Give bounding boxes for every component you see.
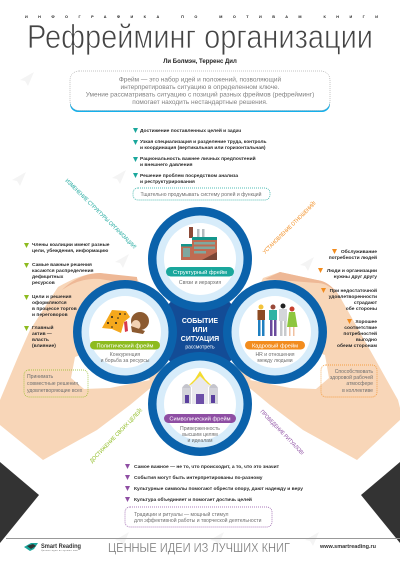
frame: human resources: HR и отношения — [255, 352, 295, 358]
list: human resources frame: обе стороны — [346, 305, 377, 312]
corner triangle: right — [361, 462, 400, 543]
list: political frame: власть — [32, 338, 49, 343]
frame: human resources: Кадровый фрейм — [252, 342, 298, 350]
logo: Smart Reading — [41, 544, 81, 550]
logo: Ценные идеи из лучших книг — [41, 550, 78, 552]
center: event or situation — [73, 207, 327, 456]
frame: symbolic: и идеалам — [187, 438, 213, 444]
frame: symbolic: Приверженность — [180, 426, 220, 432]
list: political frame: совместные решения, — [27, 381, 79, 387]
frame: symbolic — [148, 352, 252, 456]
list: human resources frame: удовлетворенности — [329, 295, 377, 300]
logo — [24, 543, 81, 552]
list: human resources frame: Способствовать — [335, 369, 373, 375]
center text — [181, 318, 219, 350]
list: political frame: удовлетворяющие всех — [27, 388, 83, 394]
center text: рассмотреть — [185, 344, 215, 350]
icon: temple — [182, 371, 218, 404]
list: human resources frame: здоровой рабочей — [330, 374, 373, 381]
list: human resources frame: атмосфере — [346, 381, 373, 387]
icon: factory — [181, 227, 217, 260]
list: human resources frame: потребности людей — [329, 254, 377, 261]
list: structural frame: и координация (вертикальная или горизонтальная) — [140, 145, 266, 151]
frame: political: Политический фрейм — [97, 342, 154, 350]
footer — [6, 538, 400, 555]
list: structural frame: Тщательно продумывать систему ролей и функций — [141, 191, 262, 198]
list: human resources frame: соответствие — [344, 326, 377, 331]
list: symbolic frame: Самое важное — не то, что происходит, а то, что это значит — [134, 464, 280, 470]
list: political frame: Цели и решения — [32, 294, 72, 300]
list: human resources frame: При недостаточной — [330, 287, 377, 294]
list: political frame: актив — — [32, 332, 52, 337]
frame: human resources — [223, 280, 327, 384]
list: political frame: Члены коалиции имеют разные — [32, 242, 110, 248]
list: political frame: (влияние) — [32, 343, 56, 349]
frame: structural: Связи и иерархия — [179, 280, 221, 286]
intro box: Умение рассматривать ситуацию с позиций разных фреймов (рефрейминг) — [86, 90, 314, 98]
list: political frame: в процессе торгов — [32, 307, 77, 312]
list: symbolic frame: Традиции и ритуалы — мощный стимул — [134, 511, 229, 518]
center text: СИТУАЦИЯ — [181, 336, 219, 343]
diagonal label: goals: ДОСТИЖЕНИЕ СВОИХ ЦЕЛЕЙ! — [88, 406, 144, 464]
list: structural frame: Узкая специализация и разделение труда, контроль — [140, 139, 266, 145]
list: political frame: оформляются — [32, 299, 67, 306]
list: political frame: и переговоров — [32, 313, 68, 318]
intro box: Фрейм — это набор идей и положений, позволяющий — [119, 76, 282, 84]
list: political frame: Принимать — [27, 374, 54, 380]
list: structural frame — [133, 127, 270, 200]
diagonal label: structure: ИЗМЕНЕНИЕ СТРУКТУРЫ ОРГАНИЗАЦИИ! — [64, 178, 137, 251]
icon: people — [258, 304, 298, 336]
diagonal label: rituals: ПРОВЕДЕНИЕ РИТУАЛОВ! — [259, 409, 305, 457]
list: symbolic frame — [125, 464, 303, 527]
list: human resources frame: выгодно — [356, 338, 377, 343]
diagonal label: relations: УСТАНОВЛЕНИЕ ОТНОШЕНИЙ! — [261, 199, 318, 255]
authors: Ли Болмэн, Терренс Дил — [163, 59, 237, 65]
list: human resources frame: обеим сторонам — [337, 342, 377, 349]
list: human resources frame: в коллективе — [342, 388, 373, 394]
series label: ИНФОГРАФИКА ПО МОТИВАМ КНИГИ — [25, 15, 378, 19]
list: structural frame: и внешнего давления — [140, 163, 193, 168]
hand: left — [0, 273, 165, 460]
list: structural frame: и реструктурирования — [140, 180, 195, 185]
list: human resources frame: потребностей — [343, 330, 377, 337]
list: political frame: цели, убеждения, информацию — [32, 247, 108, 254]
frame: structural — [148, 207, 252, 311]
icon: leopard and monkey — [102, 310, 149, 334]
intro box — [70, 71, 330, 112]
list: political frame: дефицитных — [32, 273, 64, 280]
list: political frame: Самые важные решения — [32, 262, 92, 268]
list: human resources frame: Обслуживание — [341, 248, 377, 255]
frame: political — [73, 280, 177, 384]
intro box: помогает находить нестандартные решения. — [132, 99, 268, 106]
corner triangle: left — [0, 462, 39, 543]
list: human resources frame: Хорошее — [355, 319, 377, 325]
list: structural frame: Рациональность важнее личных предпочтений — [140, 155, 256, 162]
center text: СОБЫТИЕ — [182, 318, 218, 325]
list: political frame — [24, 242, 110, 397]
list: symbolic frame: Культура объединяет и помогает достичь целей — [134, 496, 252, 503]
list: symbolic frame: События могут быть интерпретированы по-разному — [134, 474, 263, 481]
frame: structural: Структурный фрейм — [173, 269, 227, 276]
center text: ИЛИ — [193, 327, 207, 334]
frame: political: Конкуренция — [110, 352, 140, 358]
list: political frame: касаются распределения — [32, 269, 94, 274]
intro box: интерпретировать ситуацию в определенном ключе. — [121, 84, 280, 91]
list: human resources frame: страдают — [354, 301, 378, 306]
frame: symbolic: Символический фрейм — [169, 416, 231, 422]
list: human resources frame — [318, 248, 378, 397]
list: structural frame: Решение проблем посредством анализа — [140, 172, 238, 179]
list: symbolic frame: Культурные символы помогают обрести опору, дают надежду и веру — [134, 485, 303, 492]
frame: political: и борьба за ресурсы — [101, 358, 150, 364]
list: symbolic frame: для эффективной работы и творческой деятельности — [134, 517, 262, 524]
list: political frame: ресурсов — [32, 281, 55, 286]
slogan: ЦЕННЫЕ ИДЕИ ИЗ ЛУЧШИХ КНИГ — [108, 540, 290, 555]
list: human resources frame: Люди и организации — [327, 268, 377, 274]
hand: right — [235, 272, 400, 460]
frame: symbolic: высшим целям — [182, 432, 218, 438]
list: human resources frame: нужны друг другу — [334, 275, 377, 280]
list: political frame: Главный — [32, 324, 54, 331]
frame: human resources: между людьми — [257, 358, 293, 364]
list: structural frame: Достижение поставленных целей и задач — [140, 127, 241, 134]
website: www.smartreading.ru — [319, 544, 376, 550]
